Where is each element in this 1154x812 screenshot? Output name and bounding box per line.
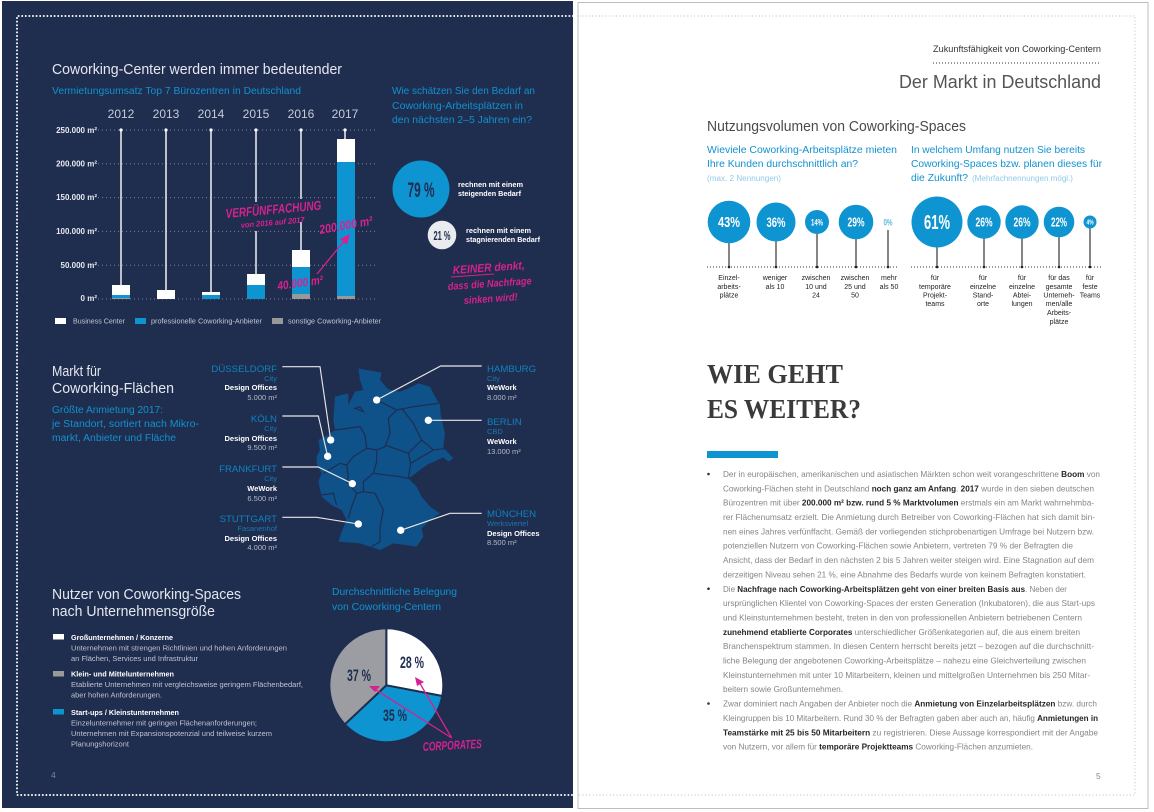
location: Stuttgart: Fasanenhof bbox=[237, 524, 278, 533]
legend item: Start-ups: Einzelunternehmer mit geringen Flächenanforderungen; bbox=[71, 718, 257, 728]
text block: bullet list: liche Belegung der angebotenen Coworking-Arbeitsplätze – nahezu eine Gleichverteilung zwischen bbox=[723, 656, 1086, 666]
location: Frankfurt: FRANKFURT bbox=[219, 464, 277, 475]
bubble chart: Umfang: plätze bbox=[1050, 319, 1068, 326]
annotation: Corporates arrows: CORPORATES bbox=[422, 737, 483, 754]
text block: bullet list: Teamstärke mit 25 bis 50 Mitarbeitern zu registrieren. Diese Aussage korrespondiert mit der Angabe bbox=[723, 727, 1098, 737]
question: Umfang: In welchem Umfang nutzen Sie bereits bbox=[911, 144, 1085, 156]
bar chart: Vermietungsumsatz: 150.000 m² bbox=[56, 193, 97, 202]
heading: Nutzer von Coworking-Spaces: Nutzer von Coworking-Spaces bbox=[52, 587, 241, 603]
bubble chart: Arbeitsplätze: weniger bbox=[762, 275, 788, 282]
bubble chart: Umfang: einzelne bbox=[970, 284, 996, 291]
text block: bullet list: ursprünglichen Klientel von Coworking-Spaces der ersten Generation (Inkubatoren), die aus Start-ups bbox=[723, 598, 1095, 608]
annotation: Verfünffachung: 200.000 m² bbox=[317, 214, 374, 237]
bubble chart: Umfang bbox=[911, 196, 1101, 326]
location: Stuttgart bbox=[220, 514, 278, 552]
bubble chart: Arbeitsplätze: arbeits- bbox=[717, 284, 741, 291]
location: Berlin: WeWork bbox=[487, 437, 518, 446]
location: Frankfurt: 6.500 m² bbox=[247, 494, 277, 503]
heading: Wie geht es weiter: WIE GEHT bbox=[707, 359, 843, 389]
legend item: Großunternehmen bbox=[53, 633, 287, 663]
location: Frankfurt: City bbox=[264, 474, 277, 483]
heading: Durchschnittliche Belegung: von Coworking-Centern bbox=[332, 601, 441, 613]
location: Köln: City bbox=[264, 424, 277, 433]
question: Umfang: die Zukunft? bbox=[911, 172, 968, 184]
map: Germany bbox=[317, 368, 453, 550]
location: Berlin: CBD bbox=[487, 427, 503, 436]
bubble chart: Arbeitsplätze: plätze bbox=[720, 292, 738, 300]
bubble: 79 percent: 79 % bbox=[408, 179, 435, 202]
heading: Coworking-Center bbox=[52, 62, 342, 97]
accent bar bbox=[707, 451, 778, 458]
location: Berlin bbox=[487, 417, 522, 456]
bubble chart: Umfang: feste bbox=[1082, 284, 1098, 291]
panel: right page background bbox=[578, 2, 1148, 808]
bar chart: Vermietungsumsatz: 100.000 m² bbox=[56, 227, 97, 236]
bubble chart: Arbeitsplätze: 14% bbox=[811, 218, 823, 228]
location: Köln: Design Offices bbox=[224, 434, 277, 443]
text block: bullet list: Kleinstunternehmen mit unter 10 Mitarbeitern, kleinen und mittelgroßen Unternehmen bis 250 Mitar- bbox=[723, 670, 1090, 680]
legend item: Klein- und Mittelunternehmen: Klein- und Mittelunternehmen bbox=[71, 670, 174, 678]
text block: bullet list: Die Nachfrage nach Coworking-Arbeitsplätzen geht von einer breiten Basis aus. Neben der bbox=[723, 584, 1067, 594]
text block: bullet list: rer Flächenumsatz erzielt. Die Anmietung durch Betreiber von Coworking-Flächen hat sich damit bin- bbox=[723, 512, 1095, 522]
bubble chart: Arbeitsplätze: 29% bbox=[848, 214, 865, 230]
legend item: Großunternehmen: Großunternehmen / Konzerne bbox=[71, 633, 173, 642]
location: Köln: KÖLN bbox=[251, 414, 277, 425]
chart legend: sonstige Coworking-Anbieter bbox=[288, 318, 382, 326]
heading: Markt für Coworking-Flächen: Markt für bbox=[52, 364, 101, 380]
bubble chart: Umfang: 61% bbox=[924, 212, 950, 234]
arrow: growth bbox=[317, 234, 350, 274]
text block: bullet list: Branchenspektrum stammen. In diesen Centern herrscht bereits jetzt – bezogen auf die durchschnitt- bbox=[723, 641, 1094, 651]
heading: Coworking-Center: Vermietungsumsatz Top 7 Bürozentren in Deutschland bbox=[52, 85, 301, 97]
annotation: Keiner denkt: KEINER denkt, bbox=[452, 260, 525, 277]
bubble chart: Umfang: für bbox=[931, 275, 940, 282]
page number 4: 4 bbox=[51, 770, 56, 780]
text block: bullet list: nen eines Jahres verfünffacht. Gemäß der vorliegenden stichprobenartigen Umfrage bei Nutzern bzw. bbox=[723, 526, 1094, 536]
bubble: 21 percent bbox=[428, 221, 540, 249]
bar chart: Vermietungsumsatz bbox=[56, 107, 376, 303]
bubble chart: Umfang: 22% bbox=[1051, 214, 1067, 230]
legend item: Klein- und Mittelunternehmen: Etablierte Unternehmen mit vergleichsweise geringem Flächenbedarf, bbox=[71, 680, 303, 689]
bubble chart: Arbeitsplätze: 0% bbox=[884, 218, 893, 228]
legend item: Start-ups: Start-ups / Kleinstunternehmen bbox=[71, 708, 179, 717]
bubble chart: Arbeitsplätze: 50 bbox=[851, 292, 859, 300]
bubble chart: Arbeitsplätze: als 10 bbox=[766, 284, 784, 291]
bubble chart: Umfang: Unterneh- bbox=[1043, 292, 1075, 300]
text block: bullet list: von Nutzern, vor allem für temporäre Projektteams Coworking-Flächen anzumieten. bbox=[723, 742, 1033, 752]
bubble chart: Umfang: orte bbox=[977, 301, 989, 308]
legend item: Start-ups: Planungshorizont bbox=[71, 740, 130, 748]
text block: bullet list: potenziellen Nutzern von Coworking-Flächen sowie Anbietern, vertreten 79 % der Befragten die bbox=[723, 541, 1073, 551]
heading: Nutzungsvolumen: Nutzungsvolumen von Coworking-Spaces bbox=[707, 119, 966, 135]
heading: Markt für Coworking-Flächen: Größte Anmietung 2017: bbox=[52, 405, 163, 416]
question: Wieviele Arbeitsplätze: Ihre Kunden durchschnittlich an? bbox=[707, 158, 858, 170]
text block: bullet list: Bürozentren mit über 200.000 m² bzw. rund 5 % Marktvolumen erstmals ein am Markt wahrnehmba- bbox=[723, 498, 1094, 508]
legend item: Klein- und Mittelunternehmen bbox=[53, 670, 303, 700]
legend item: Großunternehmen: Unternehmen mit strengen Richtlinien und hohen Anforderungen bbox=[71, 644, 287, 652]
legend item: Klein- und Mittelunternehmen: aber hohen Anforderungen. bbox=[71, 690, 162, 700]
bubble chart: Arbeitsplätze: 36% bbox=[766, 214, 786, 230]
text block: bullet list: Ansicht, dass der Bedarf in den nächsten 2 bis 5 Jahren weiter steigen wird. Eine Stagnation auf dem bbox=[723, 555, 1094, 565]
bubble: 79 percent: steigenden Bedarf bbox=[458, 189, 521, 198]
location: Köln bbox=[224, 414, 277, 452]
heading: Nutzer von Coworking-Spaces: nach Unternehmensgröße bbox=[52, 604, 215, 620]
bubble chart: Umfang: 26% bbox=[1014, 214, 1031, 230]
heading: Coworking-Center: Coworking-Center werden immer bedeutender bbox=[52, 62, 342, 78]
bubble chart: Umfang: für bbox=[979, 275, 988, 282]
location: Köln: 9.500 m² bbox=[247, 443, 277, 452]
bar chart: Vermietungsumsatz: 2016 bbox=[288, 107, 315, 121]
location: Stuttgart: 4.000 m² bbox=[247, 543, 277, 552]
bubble chart: Arbeitsplätze: mehr bbox=[881, 275, 898, 282]
bubble chart: Umfang: lungen bbox=[1011, 301, 1033, 308]
bar: 2014 bbox=[202, 292, 220, 299]
location: Düsseldorf: Design Offices bbox=[224, 383, 277, 392]
bar chart: Vermietungsumsatz: 2015 bbox=[243, 107, 270, 121]
location: Hamburg: WeWork bbox=[487, 383, 518, 392]
bar chart: Vermietungsumsatz: 2013 bbox=[153, 107, 180, 121]
bar chart: Vermietungsumsatz: 2014 bbox=[198, 107, 225, 121]
location: Frankfurt: WeWork bbox=[247, 484, 278, 493]
bar: 2016 bbox=[292, 250, 310, 299]
location: Düsseldorf: DÜSSELDORF bbox=[211, 364, 277, 375]
heading: Nutzer von Coworking-Spaces bbox=[52, 587, 241, 620]
heading: Markt für Coworking-Flächen: markt, Anbieter und Fläche bbox=[52, 433, 176, 444]
bubble chart: Umfang: für bbox=[1086, 275, 1095, 282]
annotation: Corporates arrows bbox=[369, 677, 483, 754]
bar chart: Vermietungsumsatz: 2017 bbox=[332, 107, 359, 121]
heading: Markt für Coworking-Flächen bbox=[51, 364, 199, 444]
question heading: Bedarf: Wie schätzen Sie den Bedarf an bbox=[392, 85, 535, 97]
location: Hamburg: City bbox=[487, 374, 500, 383]
heading: Markt für Coworking-Flächen: Coworking-Flächen bbox=[52, 381, 174, 397]
heading: Markt für Coworking-Flächen: je Standort, sortiert nach Mikro- bbox=[51, 419, 199, 430]
text block: bullet list: Kleingruppen bis 10 Mitarbeitern. Rund 30 % der Befragten gaben aber auch an, häufig Anmietungen in bbox=[723, 713, 1098, 723]
location: Stuttgart: Design Offices bbox=[224, 534, 277, 543]
text block: bullet list: Coworking-Flächen steht in Deutschland noch ganz am Anfang. 2017 wurde in den sieben deutschen bbox=[723, 483, 1094, 493]
location: Berlin: BERLIN bbox=[487, 417, 522, 428]
annotation: Verfünffachung: VERFÜNFFACHUNG bbox=[225, 198, 322, 221]
text block: bullet list: zunehmend etablierte Corporates unterschiedlicher Größenkategorien auf, die aus einem breiten bbox=[723, 627, 1080, 637]
bubble chart: Umfang: gesamte bbox=[1046, 284, 1073, 291]
bubble chart: Arbeitsplätze: 24 bbox=[812, 292, 820, 300]
location: München: 8.500 m² bbox=[487, 538, 517, 547]
chart legend: professionelle Coworking-Anbieter bbox=[151, 318, 263, 326]
annotation: Verfünffachung: 40.000 m² bbox=[276, 273, 325, 293]
location: München: MÜNCHEN bbox=[487, 509, 536, 520]
location: Hamburg: HAMBURG bbox=[487, 364, 536, 375]
bubble: 21 percent: stagnierenden Bedarf bbox=[466, 235, 540, 244]
question: Umfang: (Mehrfachnennungen mögl.) bbox=[972, 174, 1073, 183]
legend item: Großunternehmen: an Flächen, Services und Infrastruktur bbox=[71, 654, 198, 663]
location: Stuttgart: STUTTGART bbox=[220, 514, 277, 525]
running head bbox=[899, 44, 1101, 92]
question: Umfang: Coworking-Spaces bzw. planen dieses für bbox=[911, 158, 1102, 170]
bubble chart: Arbeitsplätze: 10 und bbox=[805, 284, 827, 291]
bubble chart: Umfang: einzelne bbox=[1009, 284, 1035, 291]
bubble chart: Umfang: Abtei- bbox=[1013, 292, 1032, 300]
bubble chart: Umfang: Teams bbox=[1080, 292, 1101, 300]
bubble chart: Arbeitsplätze bbox=[707, 201, 898, 300]
panel: left page background bbox=[2, 1, 573, 808]
location: Düsseldorf: City bbox=[264, 374, 277, 383]
map leader lines and location dots bbox=[282, 366, 482, 534]
location: Hamburg bbox=[487, 364, 536, 402]
chart legend: Business Center bbox=[73, 318, 126, 326]
question: Wieviele Arbeitsplätze: Wieviele Coworking-Arbeitsplätze mieten bbox=[707, 144, 897, 156]
pie labels: 35 % bbox=[383, 706, 407, 725]
bubble chart: Umfang: 26% bbox=[976, 214, 993, 230]
bar chart: Vermietungsumsatz: 50.000 m² bbox=[61, 261, 97, 270]
location: Düsseldorf: 5.000 m² bbox=[247, 393, 277, 402]
location: Düsseldorf bbox=[211, 364, 277, 402]
bar chart: Vermietungsumsatz: 200.000 m² bbox=[56, 160, 97, 168]
bubble chart: Umfang: Projekt- bbox=[923, 292, 948, 300]
bar: 2013 bbox=[157, 290, 175, 299]
annotation: Keiner denkt bbox=[447, 260, 532, 307]
text block: bullet list: derzeitigen Niveau sehen 21 %, eine Abnahme des Bedarfs wurde von keinem Befragten konstatiert. bbox=[723, 569, 1086, 579]
bubble chart: Arbeitsplätze: Einzel- bbox=[718, 275, 740, 282]
question heading: Bedarf bbox=[392, 85, 535, 126]
bubble chart: Umfang: temporäre bbox=[919, 284, 951, 291]
bar: 2012 bbox=[112, 285, 130, 299]
bubble chart: Umfang: men/alle bbox=[1046, 301, 1072, 308]
bubble: 79 percent bbox=[392, 160, 523, 218]
question heading: Bedarf: Coworking-Arbeitsplätzen in bbox=[392, 100, 523, 112]
annotation: Verfünffachung bbox=[225, 198, 374, 293]
heading: Wie geht es weiter bbox=[707, 359, 861, 424]
bubble: 21 percent: 21 % bbox=[434, 228, 451, 243]
location: Hamburg: 8.000 m² bbox=[487, 393, 517, 402]
text block: bullet list: Zwar dominiert nach Angaben der Anbieter noch die Anmietung von Einzelarbeitsplätzen bzw. durch bbox=[723, 699, 1097, 709]
bubble chart: Umfang: Arbeits- bbox=[1047, 310, 1072, 317]
annotation: Keiner denkt: dass die Nachfrage bbox=[447, 275, 532, 293]
bubble chart: Umfang: teams bbox=[925, 301, 945, 308]
heading: Wie geht es weiter: ES WEITER? bbox=[707, 394, 861, 424]
bubble chart: Arbeitsplätze: zwischen bbox=[841, 275, 869, 282]
heading: Durchschnittliche Belegung bbox=[332, 586, 457, 613]
bar chart: Vermietungsumsatz: 2012 bbox=[108, 107, 135, 121]
pie labels: 37 % bbox=[347, 666, 371, 685]
legend item: Start-ups bbox=[53, 708, 272, 748]
text block: bullet list bbox=[707, 469, 1100, 752]
bubble chart: Umfang: für das bbox=[1048, 275, 1070, 282]
heading: Durchschnittliche Belegung: Durchschnittliche Belegung bbox=[332, 586, 457, 598]
legend item: Start-ups: Unternehmen mit Expansionspotenzial und teilweise kurzem bbox=[71, 729, 272, 738]
location: München: Design Offices bbox=[487, 529, 540, 538]
bubble chart: Umfang: für bbox=[1018, 275, 1027, 282]
text block: bullet list: und Kleinstunternehmen besteht, treten in den von professionellen Anbietern betriebenen Centern bbox=[723, 612, 1082, 622]
question: Umfang bbox=[911, 144, 1102, 184]
pie chart: Belegung bbox=[329, 628, 443, 742]
bubble chart: Arbeitsplätze: 43% bbox=[718, 215, 740, 231]
bubble: 79 percent: rechnen mit einem bbox=[458, 180, 523, 189]
question: Wieviele Arbeitsplätze: (max. 2 Nennungen) bbox=[707, 174, 781, 183]
location: München bbox=[487, 509, 540, 547]
question heading: Bedarf: den nächsten 2–5 Jahren ein? bbox=[392, 114, 532, 126]
location: Frankfurt bbox=[219, 464, 278, 503]
bar: 2017 bbox=[337, 139, 355, 299]
bubble chart: Umfang: Stand- bbox=[973, 292, 994, 300]
bubble chart: Arbeitsplätze: als 50 bbox=[880, 284, 898, 291]
bar: 2015 bbox=[247, 274, 265, 299]
chart legend bbox=[55, 318, 382, 326]
location: Berlin: 13.000 m² bbox=[487, 447, 521, 456]
annotation: Keiner denkt: sinken wird! bbox=[463, 291, 519, 307]
pie labels: 28 % bbox=[400, 653, 424, 672]
page number 5: 5 bbox=[1096, 771, 1101, 781]
question: Wieviele Arbeitsplätze bbox=[707, 144, 897, 183]
pie labels bbox=[347, 653, 424, 725]
bar chart: Vermietungsumsatz: 0 m² bbox=[81, 294, 97, 303]
bubble chart: Arbeitsplätze: zwischen bbox=[802, 275, 830, 282]
bar chart: Vermietungsumsatz: 250.000 m² bbox=[56, 126, 97, 135]
running head: Der Markt in Deutschland bbox=[899, 71, 1101, 92]
bubble chart: Umfang: 4% bbox=[1086, 220, 1094, 226]
annotation: Verfünffachung: von 2016 auf 2017 bbox=[240, 215, 305, 230]
running head: Zukunftsfähigkeit von Coworking-Centern bbox=[933, 44, 1101, 54]
bubble chart: Arbeitsplätze: 25 und bbox=[844, 284, 866, 291]
text block: bullet list: Der in europäischen, amerikanischen und asiatischen Märkten schon weit vorangeschrittene Boom von bbox=[723, 469, 1100, 479]
bubble: 21 percent: rechnen mit einem bbox=[466, 226, 531, 235]
text block: bullet list: beitern sowie Großunternehmen. bbox=[723, 684, 843, 694]
location: München: Werksviertel bbox=[487, 519, 528, 528]
